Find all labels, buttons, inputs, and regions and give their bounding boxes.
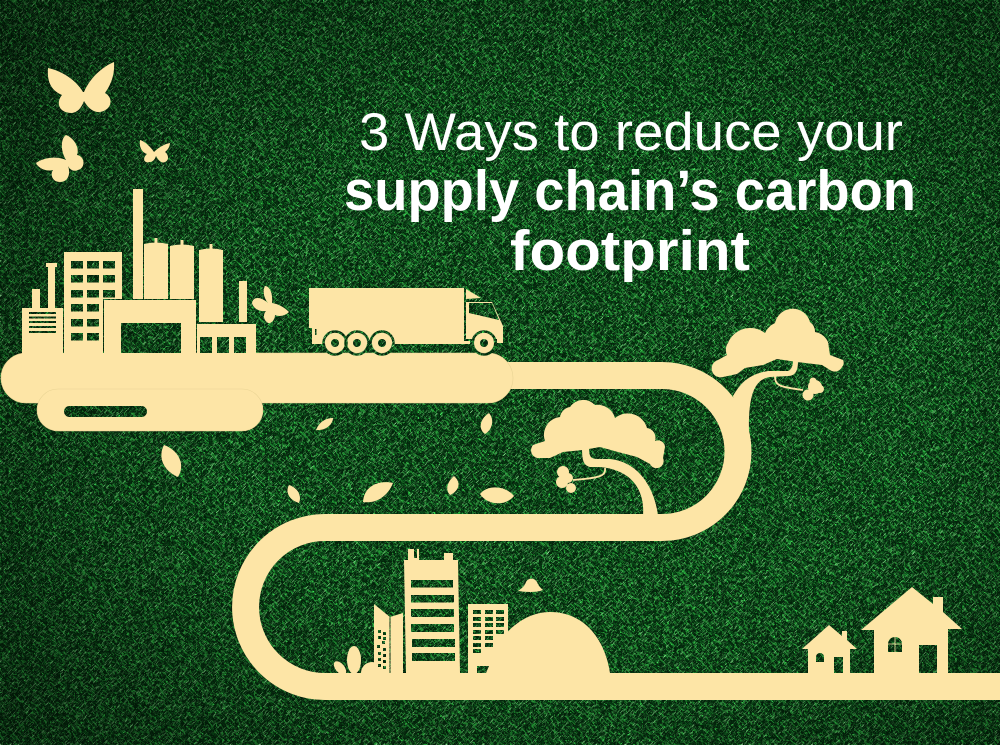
city: dome bbox=[488, 612, 610, 673]
platform: upper factory base bbox=[1, 353, 513, 403]
title bbox=[344, 103, 916, 283]
title line 2: supply chain’s carbon bbox=[344, 159, 916, 223]
factory: storage tank three bbox=[199, 244, 223, 322]
window bars: large house bbox=[888, 637, 902, 652]
city: right building bbox=[468, 604, 508, 673]
title line 1: 3 Ways to reduce your bbox=[359, 103, 903, 162]
factory: storage tank two bbox=[170, 240, 194, 299]
truck: chassis bbox=[312, 339, 503, 344]
butterfly: large bbox=[48, 62, 114, 113]
city: cloud above dome bbox=[518, 579, 543, 592]
house: small bbox=[802, 625, 857, 673]
factory: central hall bbox=[104, 300, 196, 354]
city: left building bbox=[374, 604, 403, 673]
road: winding path bbox=[246, 376, 1000, 686]
tree: lower centre bbox=[531, 400, 665, 516]
city: bush bbox=[331, 646, 383, 684]
truck: cab bbox=[466, 289, 503, 339]
factory: office block bbox=[64, 252, 122, 354]
city skyline bbox=[331, 549, 610, 684]
factory: right chimney bbox=[239, 281, 247, 322]
factory: storage tank one bbox=[144, 238, 168, 299]
truck: wheels bbox=[325, 333, 494, 353]
truck: cargo box bbox=[309, 288, 464, 341]
factory: vented block with chimneys bbox=[22, 263, 63, 354]
butterfly: medium bbox=[36, 135, 84, 182]
factory: right block bbox=[197, 324, 256, 354]
butterfly: small bbox=[140, 140, 170, 163]
platform: lower pill with slot bbox=[37, 389, 263, 431]
truck bbox=[309, 288, 503, 353]
city: central tower bbox=[404, 549, 460, 673]
factory complex bbox=[22, 189, 256, 354]
factory: tall stack bbox=[133, 189, 143, 299]
house: large bbox=[861, 587, 962, 673]
tree: upper right bbox=[712, 309, 844, 432]
title line 3: footprint bbox=[510, 219, 750, 283]
leaves bbox=[161, 413, 514, 503]
butterfly: near truck bbox=[252, 286, 289, 323]
